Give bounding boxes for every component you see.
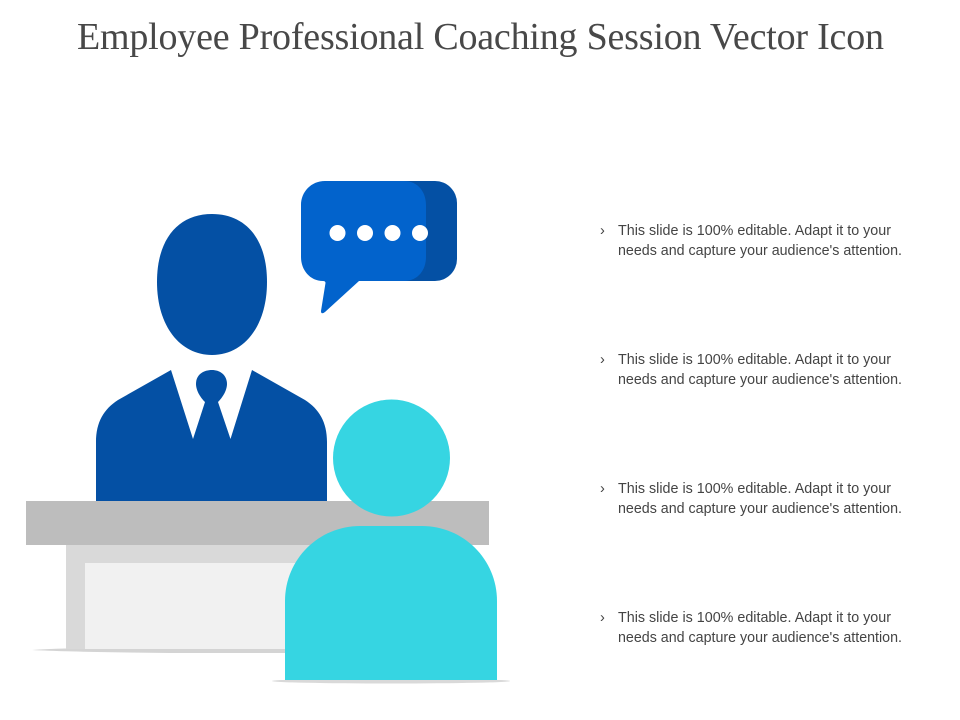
icon: coach figure	[96, 214, 327, 501]
text block 1: ›	[600, 223, 605, 239]
text block 2: needs and capture your audience's attention.	[618, 372, 902, 388]
text block 4: needs and capture your audience's attention.	[618, 630, 902, 646]
text block 4: This slide is 100% editable. Adapt it to your	[618, 610, 891, 626]
illustration: desk	[32, 545, 330, 653]
text block 4	[600, 610, 902, 646]
text block 4: ›	[600, 610, 605, 626]
bubble front with tail	[301, 181, 426, 313]
icon: client figure	[272, 400, 510, 684]
desk floor shadow	[32, 648, 330, 653]
bubble back	[380, 181, 457, 281]
client head	[333, 400, 450, 516]
coach body and tie	[96, 370, 327, 501]
text block 2	[600, 352, 902, 388]
desk inner panel	[85, 563, 330, 649]
client body	[285, 526, 497, 680]
bubble dots	[330, 225, 428, 241]
text block 3	[600, 481, 902, 517]
coach head	[157, 214, 267, 355]
text block 3: ›	[600, 481, 605, 497]
text block 3: This slide is 100% editable. Adapt it to your	[618, 481, 891, 497]
icon: speech bubble	[301, 181, 457, 313]
desk front panel	[66, 545, 330, 649]
text block 3: needs and capture your audience's attention.	[618, 501, 902, 517]
title: Employee Professional Coaching Session Vector Icon	[77, 16, 884, 58]
text block 2: This slide is 100% editable. Adapt it to your	[618, 352, 891, 368]
text block 1: needs and capture your audience's attention.	[618, 243, 902, 259]
client shadow	[272, 678, 510, 684]
text block 1	[600, 223, 902, 259]
text block 1: This slide is 100% editable. Adapt it to your	[618, 223, 891, 239]
desk top	[26, 501, 489, 545]
text block 2: ›	[600, 352, 605, 368]
